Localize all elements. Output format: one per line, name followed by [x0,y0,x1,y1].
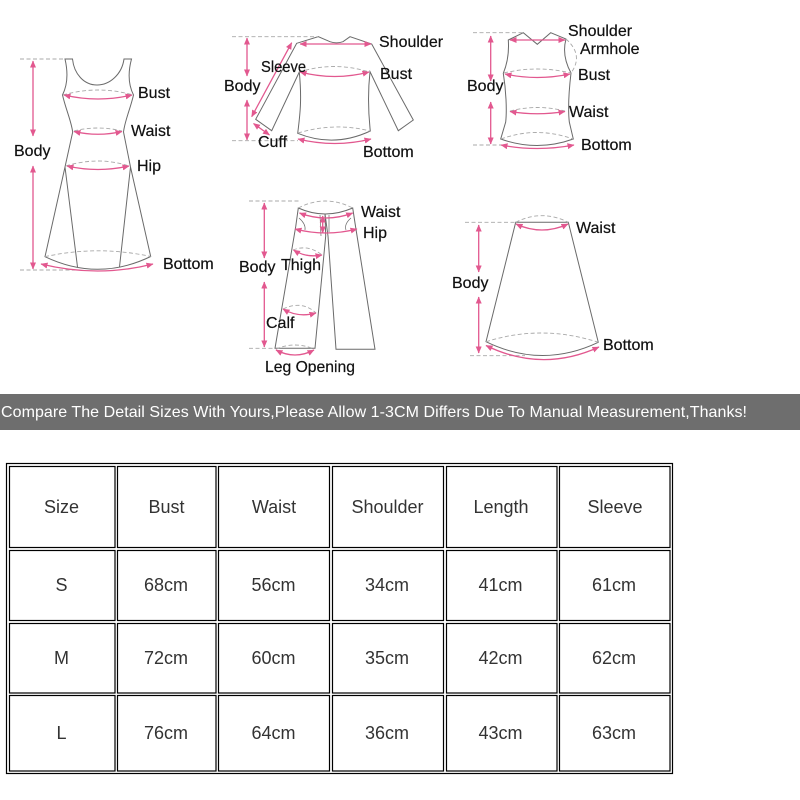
panel: long sleeve top measurement diagram: Bust [380,66,413,83]
vest labels: Shoulder [568,23,633,40]
panel: long sleeve top measurement diagram: Body [224,78,260,95]
header row: Size [44,497,79,517]
panel: long sleeve top measurement diagram [224,34,444,161]
panel: sleeveless top measurement diagram: Armhole [580,41,640,58]
panel: sleeveless top measurement diagram: Body [467,78,503,95]
panel: sleeveless top measurement diagram: Bust [578,67,611,84]
panel: dress measurement diagram: Bottom [163,256,214,273]
row: size L: 76cm [144,723,188,743]
row: size S: 61cm [592,575,636,595]
row: size M: 42cm [478,648,523,668]
vest pink measurement arrows [490,36,492,81]
panel: long sleeve top measurement diagram: Bottom [363,144,414,161]
trousers labels: Waist [361,204,401,221]
dress pink measurement arrows [32,61,34,136]
row: size S: 41cm [478,575,523,595]
top measurement guides [232,37,370,141]
panel: dress measurement diagram: Hip [137,158,161,175]
skirt outline [486,222,598,356]
panel: dress measurement diagram: Body [14,143,50,160]
size table [6,464,672,774]
panel: skirt measurement diagram [452,216,654,360]
panel: skirt measurement diagram: Bottom [603,337,654,354]
row: size S: 68cm [144,575,188,595]
panel: long sleeve top measurement diagram: Cuff [258,134,288,151]
row: size L: 64cm [251,723,296,743]
trousers pocket and waistband details [299,215,351,236]
vest measurement guides [473,33,576,145]
row: size S [10,550,670,620]
header row: Length [473,497,529,517]
skirt labels: Waist [576,220,616,237]
row: size L: L [56,723,67,743]
panel: trousers measurement diagram: Calf [266,315,295,332]
row: size M: 62cm [592,648,636,668]
dress labels: Bust [138,85,171,102]
panel: sleeveless top measurement diagram: Bottom [581,137,632,154]
dress outline [45,59,151,269]
panel: sleeveless top measurement diagram: Waist [569,104,609,121]
header row: Shoulder [351,497,424,517]
panel: trousers measurement diagram: Leg Opening [265,359,355,376]
panel: trousers measurement diagram: Body [239,259,275,276]
row: size M: M [54,648,69,668]
panel: trousers measurement diagram [239,201,401,376]
top labels: Shoulder [379,34,444,51]
skirt measurement guides [465,216,598,356]
panel: trousers measurement diagram: Thigh [281,257,321,274]
panel: dress measurement diagram [14,59,214,273]
header row [10,466,670,548]
trousers pink measurement arrows [263,203,265,258]
row: size L: 63cm [592,723,636,743]
panel: dress measurement diagram: Waist [131,123,171,140]
header row: Sleeve [587,497,643,517]
row: size S: 34cm [365,575,409,595]
banner: measurement note: Compare The Detail Sizes With Yours,Please Allow 1-3CM Differs Due To Manual Measurement,Thanks! [1,404,747,421]
header row: Waist [252,497,296,517]
row: size M: 60cm [251,648,296,668]
panel: sleeveless top measurement diagram [467,23,640,154]
row: size S: 56cm [251,575,296,595]
top pink measurement arrows [246,38,248,76]
panel: long sleeve top measurement diagram: Sleeve [261,59,306,76]
panel: skirt measurement diagram: Body [452,275,488,292]
dress measurement guides [20,59,151,270]
top outline [256,37,413,140]
panel: trousers measurement diagram: Hip [363,225,387,242]
row: size S: S [55,575,68,595]
header row: Bust [148,497,185,517]
row: size M [10,624,670,693]
trousers outline [275,208,375,349]
row: size L: 36cm [365,723,409,743]
row: size L [10,696,670,771]
row: size M: 35cm [365,648,409,668]
row: size L: 43cm [478,723,523,743]
trousers measurement guides [249,201,353,349]
vest outline [501,33,573,146]
skirt pink measurement arrows [478,225,480,272]
banner: measurement note [0,394,800,430]
row: size M: 72cm [144,648,188,668]
